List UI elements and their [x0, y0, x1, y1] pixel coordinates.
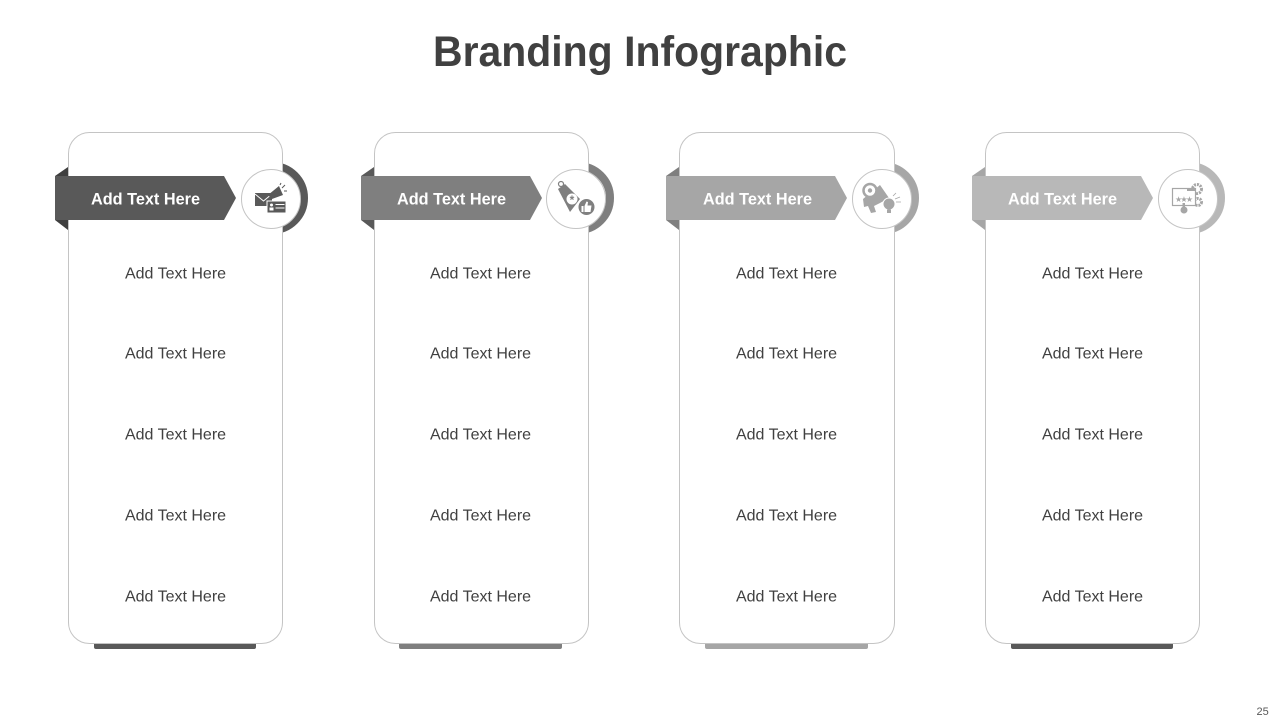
row text 4: Add Text Here — [1042, 588, 1143, 606]
row text 2: Add Text Here — [430, 426, 531, 444]
ribbon 2 — [361, 167, 542, 230]
row text 4: Add Text Here — [1042, 346, 1143, 362]
icon: rating window with gears — [1172, 184, 1202, 214]
row text 4 — [1042, 266, 1143, 606]
icon circle 1 — [242, 170, 300, 228]
row text 1: Add Text Here — [125, 426, 226, 444]
bottom bar 2 — [399, 643, 562, 649]
ribbon 2: Add Text Here — [397, 190, 506, 208]
row text 1: Add Text Here — [125, 508, 226, 524]
panel: column 2 — [361, 132, 610, 649]
row text 3: Add Text Here — [736, 426, 837, 444]
progress ring 3 — [851, 166, 915, 230]
ribbon 4: Add Text Here — [1008, 190, 1117, 208]
icon: envelope, megaphone and ID card — [255, 183, 287, 213]
panel: column 1 — [55, 132, 304, 649]
icon circle 4 — [1158, 170, 1218, 228]
card 3 — [680, 132, 894, 644]
progress ring 2 — [546, 166, 610, 230]
ribbon 4 — [972, 167, 1153, 230]
card 4 — [986, 132, 1200, 644]
icon: price tag and thumbs up — [558, 182, 595, 216]
ribbon 1: Add Text Here — [91, 190, 200, 208]
row text 2: Add Text Here — [430, 508, 531, 524]
row text 3: Add Text Here — [736, 508, 837, 524]
page number: 25 — [1256, 706, 1269, 718]
icon circle 2 — [546, 170, 606, 228]
ribbon 1 — [55, 167, 236, 230]
row text 1: Add Text Here — [125, 588, 226, 606]
ribbon 3 — [666, 167, 847, 230]
progress ring 4 — [1157, 166, 1221, 230]
card 2 — [374, 132, 588, 644]
icon: badge, megaphone and light bulb — [863, 184, 901, 213]
row text 2 — [430, 266, 531, 606]
bottom bar 4 — [1011, 643, 1173, 649]
panel: column 3 — [666, 132, 915, 649]
row text 2: Add Text Here — [430, 346, 531, 362]
bottom bar 3 — [705, 643, 868, 649]
title: Branding Infographic — [433, 28, 847, 76]
row text 4: Add Text Here — [1042, 508, 1143, 524]
icon: price tag and thumbs up: * — [570, 193, 575, 207]
ribbon 3: Add Text Here — [703, 190, 812, 208]
row text 1 — [125, 266, 226, 606]
icon circle 3 — [852, 170, 912, 228]
progress ring 1 — [240, 166, 304, 230]
panel: column 4 — [972, 132, 1221, 649]
row text 2: Add Text Here — [430, 588, 531, 606]
row text 1: Add Text Here — [125, 266, 226, 282]
bottom bar 1 — [94, 643, 256, 649]
row text 2: Add Text Here — [430, 266, 531, 282]
row text 3: Add Text Here — [736, 588, 837, 606]
icon: rating window with gears: ★★★ — [1175, 195, 1193, 204]
row text 3: Add Text Here — [736, 266, 837, 282]
row text 4: Add Text Here — [1042, 266, 1143, 282]
card 1 — [68, 132, 282, 644]
row text 3 — [736, 266, 837, 606]
row text 1: Add Text Here — [125, 346, 226, 362]
row text 4: Add Text Here — [1042, 426, 1143, 444]
row text 3: Add Text Here — [736, 346, 837, 362]
